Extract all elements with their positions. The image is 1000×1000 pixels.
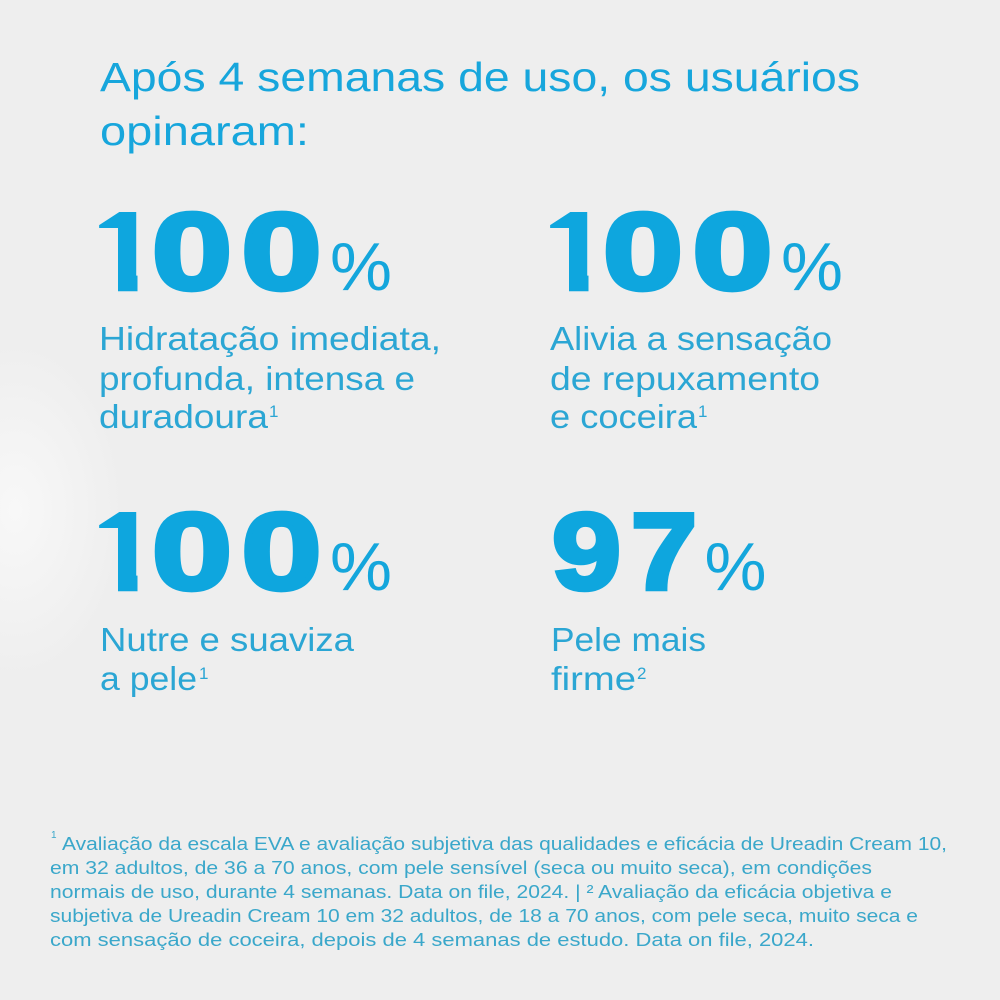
footnotes: com sensação de coceira, depois de 4 semanas de estudo. Data on file, 2024. — [50, 929, 814, 950]
stat: 97% firmer: firme — [551, 660, 636, 697]
title: opinaram: — [100, 108, 309, 154]
stat: 100% hydration: duradoura — [99, 398, 269, 435]
stat: 100% nourish: % — [330, 529, 392, 605]
stat: 97% firmer: 9 — [552, 491, 621, 613]
stat: 100% relief: Alivia a sensação — [550, 320, 832, 357]
stat: 100% hydration: 0 — [242, 191, 322, 313]
footnotes — [50, 830, 947, 950]
stat: 100% relief: 1 — [698, 402, 707, 421]
stat: 100% nourish: 0 — [152, 491, 232, 613]
stat: 97% firmer: Pele mais — [551, 621, 706, 658]
stat: 100% relief: 0 — [692, 191, 772, 313]
footnotes: 1 — [51, 830, 57, 841]
stat: 100% relief: 1 — [545, 191, 605, 313]
footnotes: normais de uso, durante 4 semanas. Data on file, 2024. | ² Avaliação da eficácia objetiva e — [50, 881, 892, 902]
stat: 100% hydration — [99, 210, 438, 428]
title: Após 4 semanas de uso, os usuários — [100, 54, 860, 100]
stat: 100% nourish: a pele — [100, 660, 197, 697]
stat: 97% firmer — [551, 491, 766, 697]
stat: 97% firmer: % — [704, 529, 766, 605]
stat: 100% nourish: 1 — [199, 664, 208, 683]
title — [100, 54, 860, 154]
stat: 100% relief: de repuxamento — [550, 360, 820, 397]
stat: 100% relief — [550, 210, 840, 428]
stat: 100% hydration: 1 — [269, 402, 278, 421]
stat: 100% relief: 0 — [603, 191, 683, 313]
footnotes: subjetiva de Ureadin Cream 10 em 32 adultos, de 18 a 70 anos, com pele seca, muito seca e — [50, 905, 918, 926]
stat: 100% nourish: Nutre e suaviza — [100, 621, 355, 658]
stat: 100% hydration: 1 — [94, 191, 154, 313]
footnotes: em 32 adultos, de 36 a 70 anos, com pele sensível (seca ou muito seca), em condições — [50, 857, 872, 878]
stat: 100% relief: e coceira — [550, 398, 698, 435]
stat: 100% hydration: % — [330, 229, 392, 305]
stat: 100% hydration: Hidratação imediata, — [99, 320, 441, 357]
stat: 100% hydration: profunda, intensa e — [99, 360, 415, 397]
stat: 97% firmer: 2 — [637, 664, 646, 683]
stat: 100% nourish: 0 — [242, 491, 322, 613]
stat: 100% nourish: 1 — [94, 491, 154, 613]
stat: 97% firmer: 7 — [631, 491, 697, 613]
stat: 100% nourish — [99, 510, 390, 697]
footnotes: Avaliação da escala EVA e avaliação subjetiva das qualidades e eficácia de Ureadin Cream 10, — [62, 833, 947, 854]
stat: 100% hydration: 0 — [152, 191, 232, 313]
stat: 100% relief: % — [781, 229, 843, 305]
